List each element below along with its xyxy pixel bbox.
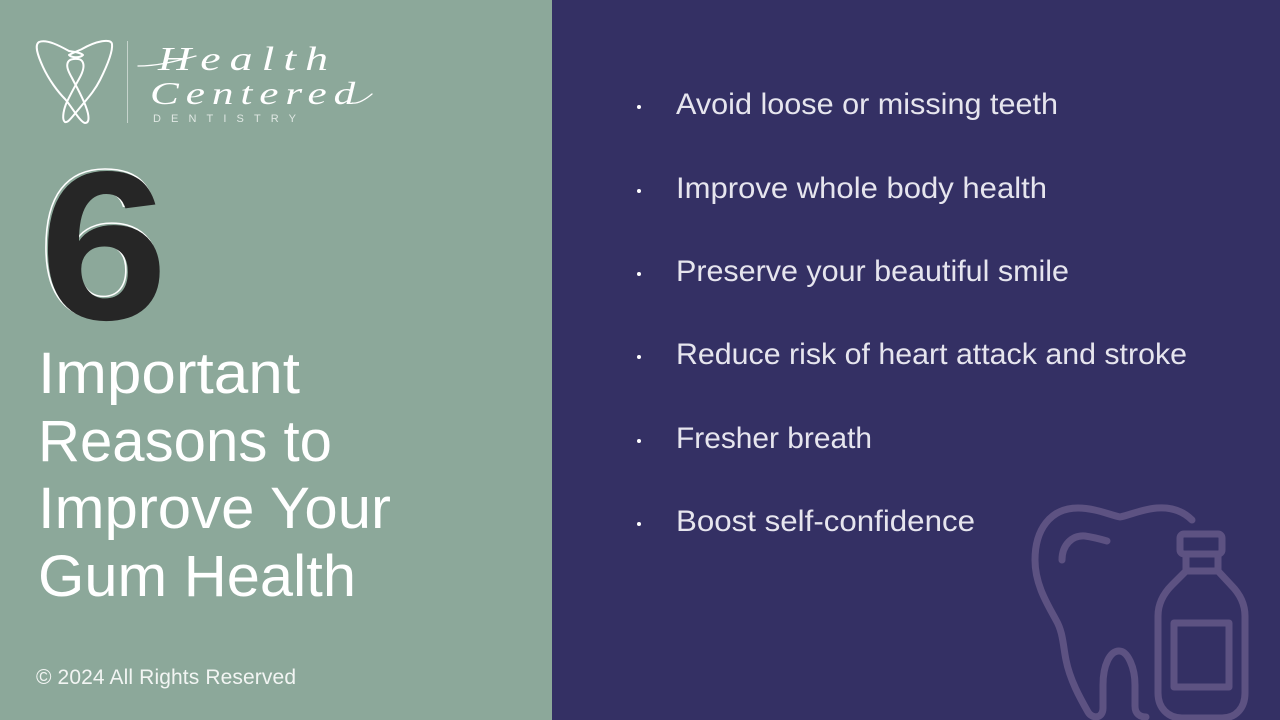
logo wordmark: Centered: Centered bbox=[150, 76, 356, 112]
logo wordmark: Dentistry: DENTISTRY bbox=[153, 113, 297, 125]
title bbox=[38, 341, 391, 609]
panel: left green panel bbox=[0, 0, 552, 720]
bullet 2: Improve whole body health bbox=[676, 172, 1047, 205]
bullet 1: Avoid loose or missing teeth bbox=[676, 88, 1058, 121]
bullet list bbox=[637, 88, 1187, 538]
title line 4: Gum Health bbox=[38, 544, 356, 609]
bullet 3: Preserve your beautiful smile bbox=[676, 255, 1069, 288]
title line 1: Important bbox=[38, 341, 300, 406]
number 6 outline: 6 bbox=[38, 125, 166, 362]
logo wordmark: Health: Health bbox=[157, 40, 328, 78]
bullet 5: Fresher breath bbox=[676, 422, 872, 455]
logo: Health Centered Dentistry bbox=[37, 40, 372, 125]
bullet 4: Reduce risk of heart attack and stroke bbox=[676, 338, 1187, 371]
bullet 6: Boost self-confidence bbox=[676, 505, 975, 538]
logo divider bbox=[127, 41, 128, 123]
icon: bottle bbox=[1158, 534, 1245, 718]
title line 2: Reasons to bbox=[38, 409, 332, 474]
icon: tooth logo bbox=[37, 41, 112, 123]
panel: right navy panel bbox=[552, 0, 1280, 720]
logo wordmark swashes bbox=[138, 56, 372, 103]
copyright footer: © 2024 All Rights Reserved bbox=[36, 666, 296, 689]
icon: tooth bbox=[1035, 508, 1192, 717]
icon: tooth and mouthwash bottle watermark bbox=[1035, 508, 1245, 718]
number 6 fill: 6 bbox=[40, 127, 168, 364]
title line 3: Improve Your bbox=[38, 476, 391, 541]
big number 6 bbox=[38, 125, 168, 364]
